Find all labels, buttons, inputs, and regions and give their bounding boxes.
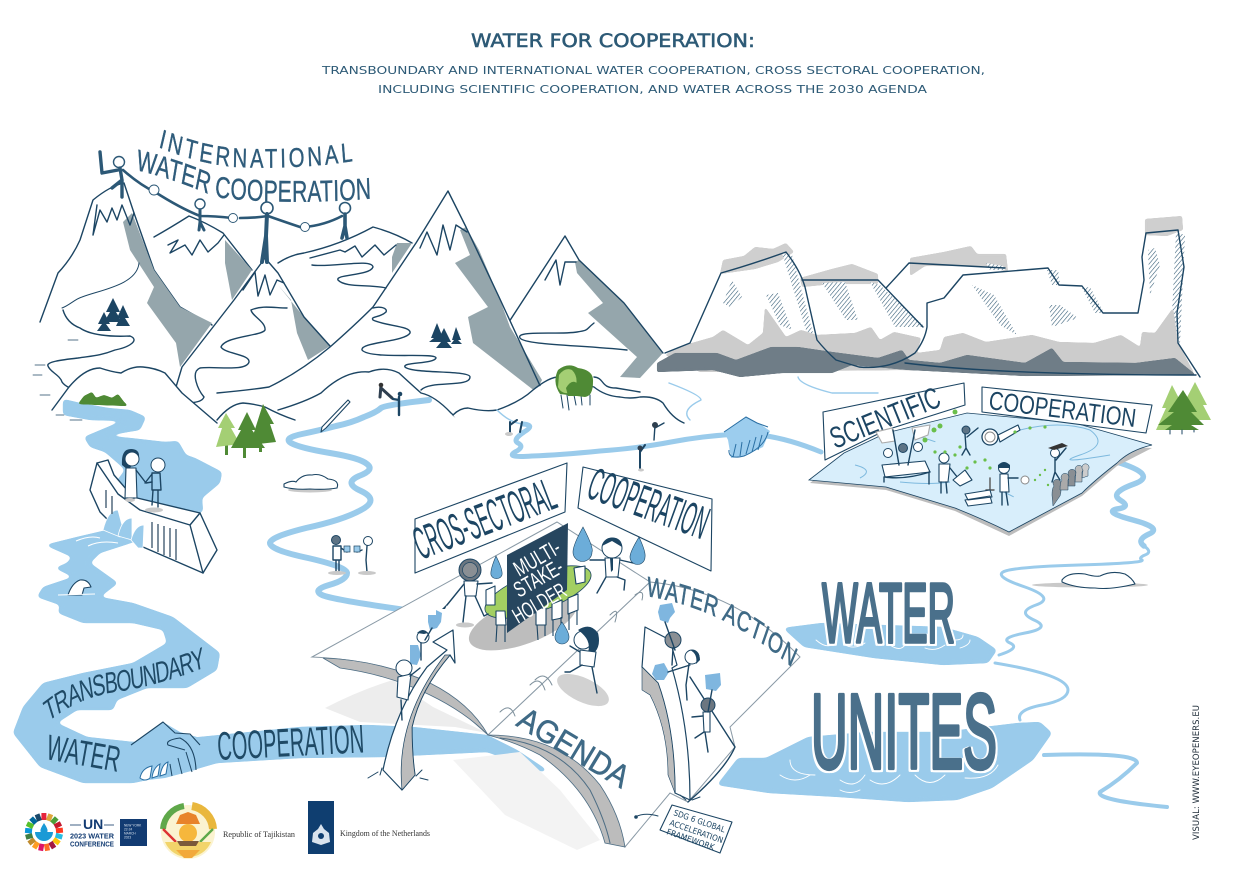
- foothills: [30, 367, 260, 460]
- UN 2023 water conference logo: MARCH: [124, 832, 136, 836]
- subtitle line 1: TRANSBOUNDARY AND INTERNATIONAL WATER COOPERATION, CROSS SECTORAL COOPERATION,: [321, 64, 985, 77]
- clasped hands: [149, 185, 310, 232]
- water lettering: WATER: [44, 727, 124, 780]
- mountain 4: [278, 227, 420, 300]
- mountain 6 outline: [507, 236, 663, 353]
- water action text: WATER ACTION: [648, 576, 798, 666]
- main heading: WATER FOR COOPERATION:: [471, 31, 755, 52]
- transboundary lettering: TRANSBOUNDARY: [42, 647, 202, 718]
- cross-sectoral banner: [406, 463, 567, 573]
- person right: [145, 458, 165, 512]
- UN 2023 water conference logo: 22-24: [124, 828, 132, 832]
- mountain 6: [507, 236, 663, 390]
- person 2: [195, 199, 205, 230]
- mountain 4 shadow: [392, 243, 412, 273]
- mountain 3 outline: [176, 258, 330, 387]
- text: CROS-SECTORAL: [406, 468, 563, 569]
- UN 2023 water conference logo: 2023: [124, 836, 131, 840]
- small figures on right river: [505, 420, 664, 472]
- text: UNITES: [811, 673, 997, 791]
- people on hill: handshake: [379, 383, 402, 415]
- map rivers: [855, 425, 1110, 497]
- mountain 2 and 4 outlines: [154, 216, 412, 270]
- rocks, right: [1032, 572, 1148, 588]
- group of small people: [1052, 464, 1089, 506]
- water ripples: [780, 635, 998, 792]
- lake under WATER: [783, 623, 997, 665]
- climber 2: [685, 650, 699, 664]
- SDG 6 tag: [634, 805, 732, 853]
- people joining hands on peaks: [100, 152, 350, 262]
- scientific cooperation map: [809, 381, 1152, 536]
- handshake in lower river: [130, 722, 200, 781]
- grass: [680, 795, 700, 800]
- puzzle piece upper: [428, 610, 442, 630]
- smiling man with tie and two drops: [573, 527, 645, 593]
- mountain 3 shadow: [278, 285, 330, 360]
- Netherlands logo bar: [308, 801, 334, 854]
- bushes on left hill: [78, 392, 128, 406]
- arrow shaft and head: [642, 627, 690, 800]
- map table with flags: [876, 425, 930, 484]
- people exchanging gifts: [328, 536, 376, 575]
- drop right: [630, 537, 645, 564]
- book pages, grey arcs: [323, 658, 625, 847]
- cliff foot light grey: [665, 307, 1194, 375]
- spray: [76, 537, 118, 546]
- river: central meander: [270, 377, 1167, 807]
- arrow grey edge: [642, 667, 675, 793]
- arrow grey edge: [401, 655, 450, 790]
- SDG wheel: [25, 813, 63, 851]
- climber 1: [665, 632, 681, 648]
- woman carrying a drop: [553, 622, 613, 713]
- rocks, left: [284, 474, 338, 492]
- pine trees, dark blue (left): [97, 298, 130, 331]
- dolphin: [58, 580, 95, 595]
- dam body: [90, 460, 217, 573]
- international water cooperation lettering: INTERNATIONAL: [160, 130, 352, 168]
- arrow shaft and head: [383, 630, 455, 790]
- mountain 1: [40, 183, 212, 400]
- open book: water action page: [488, 582, 800, 847]
- climber lower: [396, 660, 412, 676]
- cliff outlines: [665, 230, 1200, 377]
- mountain 2: [154, 216, 252, 330]
- green pine trees: [216, 404, 276, 458]
- UN 2023 water conference logo: 2023 WATER: [70, 832, 114, 840]
- Tajikistan emblem: [161, 805, 215, 859]
- title: [321, 31, 985, 96]
- cord with bookmarks along spine: [500, 592, 643, 716]
- mountain 5 outline: [217, 191, 542, 393]
- cliff foot dark band: [657, 347, 1196, 377]
- international water cooperation lettering: WATER COOPERATION: [138, 149, 370, 202]
- person 1: [100, 152, 124, 197]
- visual credit: VISUAL: WWW.EYEOPENERS.EU: [1192, 705, 1202, 840]
- person left: [122, 449, 152, 502]
- drop: [491, 556, 502, 579]
- mountains: [30, 183, 690, 460]
- mountain rivers: [48, 263, 640, 403]
- SDG 6 tag: SDG 6 GLOBAL: [672, 807, 727, 835]
- cliff hatching: [723, 232, 1185, 343]
- puzzle middle: [652, 663, 669, 680]
- text: COOPERATION: [582, 458, 716, 549]
- scientist with laptop: [939, 453, 972, 493]
- multi-stakeholder board: MULTI-: [509, 535, 565, 581]
- SDG 6 tag: ACCELERATION: [668, 817, 725, 845]
- pine trees, dark blue (centre): [429, 323, 462, 348]
- river: transboundary water cooperation: [13, 530, 547, 783]
- multi-stakeholder board: [507, 523, 571, 633]
- mountain 6 shadow: [575, 260, 663, 378]
- cliff snow caps: [720, 216, 1183, 287]
- deciduous trees: [555, 365, 593, 410]
- agenda text: AGENDA: [511, 700, 637, 795]
- cooperation banner centre: [578, 458, 716, 571]
- multi-stakeholder board: STAKE-: [509, 554, 567, 602]
- text: WATER: [822, 566, 955, 660]
- puzzle piece lower: [410, 645, 421, 665]
- grass: [368, 768, 428, 780]
- mountain 2 shadow: [225, 240, 252, 300]
- scientific banner: SCIENTIFIC: [825, 381, 945, 455]
- multi-stakeholder table shadow: [462, 582, 584, 662]
- green specks: [922, 410, 1049, 486]
- right green pine trees: [1156, 382, 1211, 434]
- dam spillways: [103, 510, 144, 548]
- climber upper: [417, 631, 429, 643]
- Kingdom of the Netherlands label: Kingdom of the Netherlands: [340, 828, 431, 838]
- book shadow under right page: [453, 752, 600, 850]
- right arch arrow with climbers: [642, 603, 735, 802]
- river: upper left to dam pool: [63, 399, 222, 520]
- cliffs: scientific landscape backdrop: [657, 216, 1200, 377]
- scientist with flask: [986, 462, 1029, 505]
- UN 2023 water conference logo: [25, 813, 147, 851]
- person 4: [340, 202, 350, 238]
- right page wedge: [688, 677, 735, 802]
- stack of papers: [965, 490, 992, 506]
- SDG 6 tag: FRAMEWORK: [665, 826, 716, 852]
- green table: [479, 555, 597, 629]
- open book: cross-sectoral page: [312, 522, 650, 735]
- magnifying scientist: [962, 425, 1020, 455]
- book shadow under left page: [325, 680, 487, 733]
- UN 2023 water conference logo: NEW YORK: [124, 824, 142, 828]
- mountain 5 shadow: [455, 227, 542, 392]
- riverbank specks: [33, 340, 82, 420]
- scientific banner: [823, 381, 965, 460]
- drop left: [573, 527, 592, 562]
- climber 3: [701, 698, 715, 712]
- cooperation lettering: COOPERATION: [216, 717, 365, 769]
- puzzle top: [658, 603, 675, 623]
- Republic of Tajikistan label: Republic of Tajikistan: [223, 829, 296, 839]
- astronaut with water drop: [442, 556, 502, 628]
- mountain 3: [176, 258, 330, 410]
- dam with two people shaking hands: [76, 449, 217, 573]
- fallen tree by the river: [321, 400, 350, 432]
- multi-stakeholder board: HOLDER: [508, 578, 571, 628]
- mountain 1 shadow: [123, 213, 212, 367]
- subtitle line 2: INCLUDING SCIENTIFIC COOPERATION, AND WATER ACROSS THE 2030 AGENDA: [378, 83, 928, 96]
- UN 2023 water conference logo: CONFERENCE: [70, 840, 114, 848]
- left arch arrow with climbers: [368, 610, 455, 790]
- UN 2023 water conference logo: UN: [83, 816, 103, 832]
- mountain 5: [217, 191, 542, 420]
- cooperation banner: COOPERATION: [987, 385, 1138, 433]
- graduate figure: [1048, 443, 1068, 482]
- lake under UNITES: [717, 722, 1052, 802]
- puzzle lower: [705, 673, 721, 691]
- snow lines: [93, 205, 576, 296]
- handshake in right river: [724, 417, 770, 458]
- chairs: [486, 566, 585, 642]
- person 3: [261, 202, 273, 262]
- mountain 1 outline: [40, 183, 212, 325]
